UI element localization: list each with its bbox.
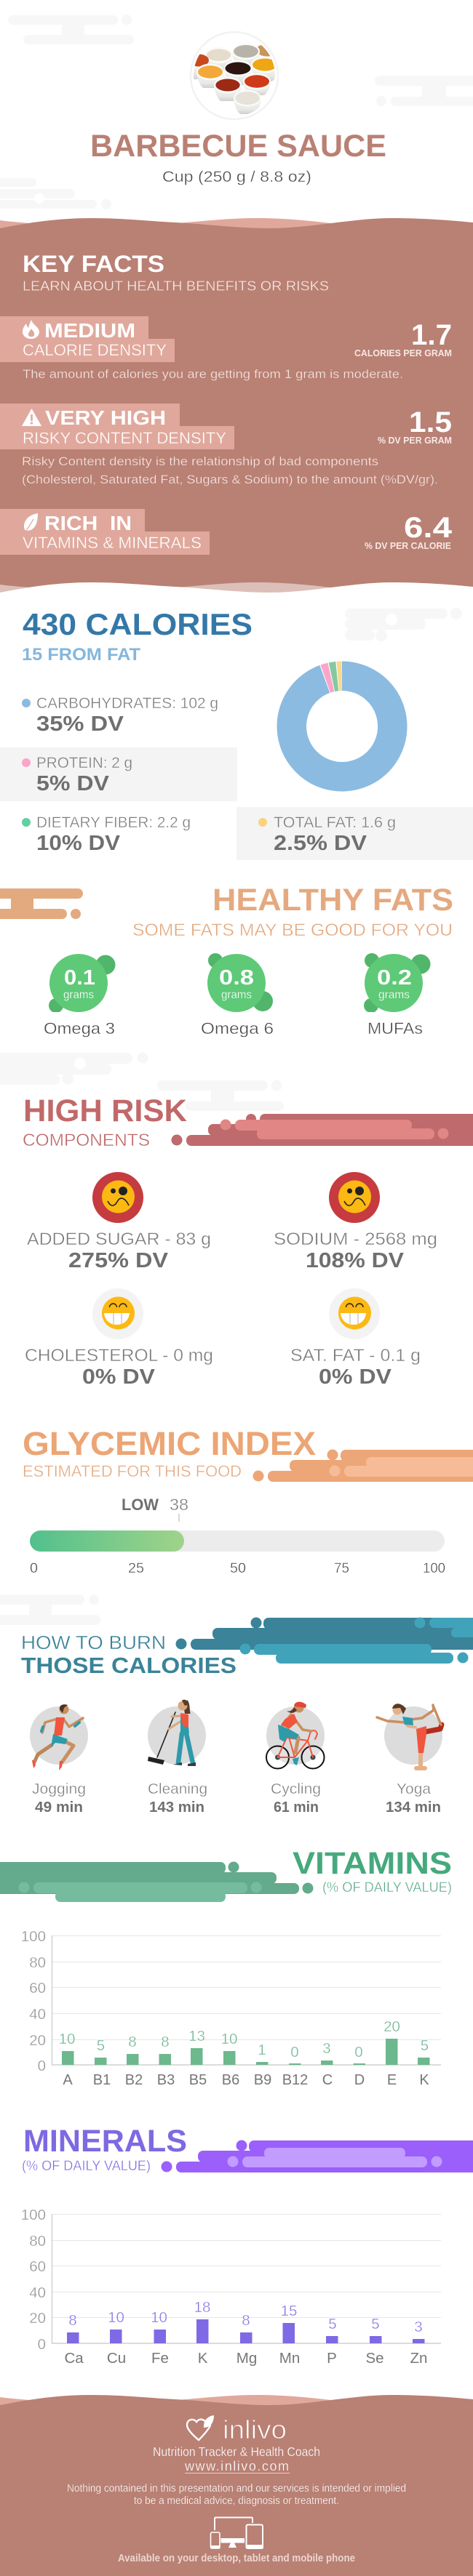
value: 1.7 — [411, 319, 452, 351]
icon: happy face — [329, 1288, 380, 1339]
component: added sugar — [27, 1172, 211, 1272]
bar chart: minerals: 20 — [29, 2310, 46, 2327]
unit: CALORIES PER GRAM — [354, 348, 452, 358]
component: cholesterol: 0% DV — [82, 1365, 156, 1389]
gauge scale: 0 — [30, 1561, 38, 1576]
gauge scale: 100 — [423, 1561, 445, 1576]
donut chart — [277, 662, 408, 791]
bar chart: minerals: 80 — [29, 2233, 46, 2250]
badge: mufas: 0.2 — [377, 966, 412, 990]
bar chart: vitamins: 10 — [59, 2031, 75, 2047]
icon: sad face — [329, 1172, 380, 1223]
fact: rich in vitamins and minerals — [0, 509, 453, 555]
bar chart: vitamins: B6 — [222, 2072, 239, 2088]
activity: jogging: 49 min — [35, 1799, 83, 1815]
panel: footer — [0, 2395, 473, 2576]
rating: VERY HIGH — [45, 406, 166, 429]
icon: devices — [210, 2517, 263, 2549]
bar chart: vitamins: C — [322, 2072, 333, 2088]
bar chart: minerals: P — [327, 2350, 337, 2367]
bar chart: vitamins: D — [354, 2072, 365, 2088]
badge: omega 6 — [201, 953, 274, 1038]
bar chart: minerals: 8 — [68, 2312, 77, 2329]
fact: risky content density — [0, 404, 452, 486]
bar chart: minerals: 40 — [29, 2284, 46, 2301]
badge: omega 6: Omega 6 — [201, 1019, 274, 1038]
subheading: ESTIMATED FOR THIS FOOD — [23, 1462, 242, 1480]
bar chart: vitamins: E — [387, 2072, 397, 2088]
bar chart: vitamins — [21, 1928, 441, 2088]
icon: leaf — [24, 513, 38, 531]
heading: GLYCEMIC INDEX — [23, 1425, 316, 1462]
bar chart: vitamins: B1 — [93, 2072, 111, 2088]
badge: omega 6: 0.8 — [219, 966, 254, 990]
label: RISKY CONTENT DENSITY — [23, 429, 226, 447]
bar chart: minerals: 18 — [194, 2299, 210, 2316]
badge: omega 3: Omega 3 — [44, 1019, 115, 1038]
gauge scale: 75 — [334, 1561, 349, 1576]
subheading: SOME FATS MAY BE GOOD FOR YOU — [132, 920, 453, 940]
badge: mufas: MUFAs — [367, 1019, 423, 1038]
fact: calorie density — [0, 316, 452, 381]
bar chart: vitamins: 5 — [421, 2037, 429, 2054]
food image: bowls of sauces — [190, 31, 279, 120]
icon: person sweeping — [148, 1700, 206, 1766]
bar chart: vitamins: 20 — [383, 2018, 400, 2035]
component: sodium — [274, 1172, 437, 1272]
legend: carbohydrates — [22, 695, 218, 736]
gauge scale — [30, 1561, 445, 1576]
activity: yoga: Yoga — [397, 1781, 432, 1797]
bar chart: vitamins: 0 — [38, 2058, 46, 2074]
heading: HEALTHY FATS — [212, 883, 453, 918]
component: added sugar: 275% DV — [68, 1249, 169, 1272]
description: The amount of calories you are getting from 1 gram is moderate. — [23, 368, 403, 381]
badge: omega 3 — [44, 954, 115, 1038]
bar chart: minerals: 10 — [151, 2309, 167, 2326]
unit: % DV PER CALORIE — [365, 541, 451, 551]
legend: total fat: TOTAL FAT: 1.6 g — [274, 814, 396, 831]
badge: mufas: grams — [378, 989, 410, 1001]
bar chart: minerals: Cu — [107, 2350, 126, 2367]
activity: jogging — [30, 1704, 88, 1815]
component: saturated fat — [290, 1288, 421, 1389]
icon: yoga pose — [377, 1704, 442, 1768]
icon: warning — [22, 409, 41, 426]
availability note: Available on your desktop, tablet and mobile phone — [118, 2552, 355, 2564]
component: sodium: 108% DV — [306, 1249, 405, 1272]
bar chart: vitamins: 8 — [128, 2034, 137, 2050]
panel: vitamins — [0, 1846, 452, 2088]
heading: key facts: KEY FACTS — [23, 251, 164, 277]
gauge scale: 50 — [230, 1561, 246, 1576]
activity: cleaning: Cleaning — [148, 1781, 207, 1797]
decorative banner — [0, 1861, 313, 1902]
subheading: (% OF DAILY VALUE) — [322, 1880, 452, 1895]
subheading: COMPONENTS — [23, 1131, 150, 1150]
bar chart: minerals: 60 — [29, 2258, 46, 2275]
bar chart: vitamins: B5 — [189, 2072, 207, 2088]
bar chart: vitamins: 0 — [354, 2044, 363, 2061]
bar chart: vitamins: 1 — [258, 2042, 266, 2058]
rating: RICH IN — [44, 512, 132, 534]
bar chart: vitamins: 60 — [29, 1980, 46, 1997]
label: CALORIE DENSITY — [23, 341, 167, 359]
decorative banner — [0, 888, 83, 919]
decorative banner — [253, 1450, 473, 1482]
legend: carbohydrates: 35% DV — [36, 713, 124, 736]
gauge value — [122, 1496, 188, 1522]
bar chart: minerals: Mn — [279, 2350, 300, 2367]
component: saturated fat: 0% DV — [319, 1365, 392, 1389]
panel: minerals — [21, 2124, 473, 2367]
component: saturated fat: SAT. FAT - 0.1 g — [290, 1346, 421, 1365]
description — [22, 455, 438, 486]
bar chart: minerals: 10 — [108, 2309, 124, 2326]
gauge value: LOW — [122, 1496, 159, 1514]
bar chart: minerals: Mg — [236, 2350, 257, 2367]
heading: MINERALS — [23, 2124, 187, 2159]
activity: cleaning — [148, 1700, 207, 1815]
bar chart: minerals: 8 — [242, 2312, 250, 2329]
panel: high risk components — [23, 1094, 473, 1389]
description: Risky Content density is the relationship of bad components — [22, 455, 378, 468]
activity: yoga: 134 min — [386, 1799, 441, 1815]
legend: dietary fiber — [22, 814, 191, 855]
bar chart: minerals: 3 — [414, 2319, 423, 2335]
bar chart: vitamins: B3 — [157, 2072, 175, 2088]
disclaimer: Nothing contained in this presentation and our services is intended or implied — [67, 2482, 406, 2495]
badge: mufas — [364, 953, 431, 1038]
bar chart: minerals: 0 — [38, 2336, 46, 2353]
bar chart: vitamins: B9 — [254, 2072, 271, 2088]
bar chart: vitamins: 20 — [29, 2032, 46, 2049]
rating: MEDIUM — [44, 319, 135, 342]
tagline: Nutrition Tracker & Health Coach — [153, 2444, 320, 2459]
legend: total fat — [236, 807, 473, 860]
bar chart: minerals: Ca — [64, 2350, 84, 2367]
bar chart: vitamins: B12 — [282, 2072, 308, 2088]
legend: protein: PROTEIN: 2 g — [36, 755, 132, 771]
value: 1.5 — [409, 406, 452, 438]
description: (Cholesterol, Saturated Fat, Sugars & Sodium) to the amount (%DV/gr). — [22, 473, 438, 486]
website link: www.inlivo.com — [184, 2459, 289, 2473]
panel: healthy fats — [0, 883, 453, 1038]
icon: flame — [23, 320, 39, 339]
heading line 2: THOSE CALORIES — [21, 1653, 236, 1678]
bar chart: minerals: K — [198, 2350, 208, 2367]
legend: protein — [0, 747, 237, 801]
subheading: LEARN ABOUT HEALTH BENEFITS OR RISKS — [23, 279, 329, 294]
icon: jogger — [30, 1704, 88, 1770]
bar chart: vitamins: 10 — [221, 2031, 237, 2047]
icon: sad face — [92, 1172, 143, 1223]
heading: calories: 430 CALORIES — [23, 607, 253, 641]
activity: cycling: Cycling — [271, 1781, 321, 1797]
value: 6.4 — [404, 512, 453, 544]
bar chart: minerals — [21, 2207, 441, 2367]
activity: cycling — [266, 1702, 325, 1815]
bar chart: minerals: Fe — [151, 2350, 169, 2367]
panel: glycemic index — [23, 1425, 473, 1576]
panel: calories — [0, 607, 473, 860]
bar chart: vitamins: K — [419, 2072, 429, 2088]
unit: % DV PER GRAM — [378, 436, 452, 446]
badge: omega 3: grams — [63, 989, 94, 1001]
gauge scale: 25 — [128, 1561, 144, 1576]
bar chart: vitamins: 3 — [322, 2040, 331, 2057]
subheading: from fat: 15 FROM FAT — [22, 645, 140, 665]
activity: cleaning: 143 min — [149, 1799, 204, 1815]
bar chart: minerals: Se — [365, 2350, 384, 2367]
bar chart: vitamins: 80 — [29, 1954, 46, 1971]
disclaimer — [67, 2482, 406, 2507]
disclaimer: to be a medical advice, diagnosis or treatment. — [134, 2495, 339, 2507]
icon: happy face — [92, 1288, 143, 1339]
bar chart: vitamins: 40 — [29, 2006, 46, 2023]
bar chart: minerals: 100 — [21, 2207, 46, 2223]
panel: key facts — [0, 218, 473, 604]
legend: protein: 5% DV — [36, 772, 110, 795]
badge: omega 6: grams — [221, 989, 252, 1001]
gauge value: 38 — [170, 1496, 188, 1514]
bar chart: vitamins: A — [63, 2072, 73, 2088]
legend: carbohydrates: CARBOHYDRATES: 102 g — [36, 695, 218, 712]
legend: dietary fiber: 10% DV — [36, 832, 121, 855]
bar chart: vitamins: 13 — [188, 2028, 205, 2045]
legend: dietary fiber: DIETARY FIBER: 2.2 g — [36, 814, 191, 831]
heading line 1: HOW TO BURN — [21, 1632, 166, 1653]
component: added sugar: ADDED SUGAR - 83 g — [27, 1229, 211, 1249]
logo: inlivo — [187, 2415, 287, 2444]
bar chart: vitamins: 0 — [290, 2044, 299, 2061]
bar chart: minerals: 5 — [328, 2316, 337, 2332]
decorative banner — [172, 1114, 473, 1146]
heading: VITAMINS — [293, 1846, 452, 1881]
bar chart: minerals: 5 — [371, 2316, 380, 2332]
decorative banner — [176, 1617, 473, 1664]
bar chart: minerals: 15 — [281, 2303, 297, 2319]
bar chart: vitamins: 100 — [21, 1928, 46, 1945]
decorative banner — [162, 2140, 473, 2172]
heading: HIGH RISK — [23, 1094, 187, 1128]
bar chart: minerals: Zn — [410, 2350, 427, 2367]
subheading: (% OF DAILY VALUE) — [22, 2159, 151, 2174]
activity: yoga — [377, 1704, 442, 1815]
logo: inlivo: inlivo — [223, 2415, 287, 2444]
bar chart: vitamins: 5 — [97, 2037, 105, 2054]
component: sodium: SODIUM - 2568 mg — [274, 1229, 437, 1249]
panel: how to burn those calories — [21, 1617, 473, 1815]
bar chart: vitamins: B2 — [125, 2072, 143, 2088]
serving size: Cup (250 g / 8.8 oz) — [162, 169, 311, 185]
icon: cyclist — [266, 1702, 325, 1768]
badge: omega 3: 0.1 — [64, 966, 95, 990]
activity: jogging: Jogging — [32, 1781, 86, 1797]
label: VITAMINS & MINERALS — [23, 534, 202, 552]
component: cholesterol: CHOLESTEROL - 0 mg — [25, 1346, 213, 1365]
component: cholesterol — [25, 1288, 213, 1389]
bar chart: vitamins: 8 — [161, 2034, 170, 2050]
title: BARBECUE SAUCE — [90, 129, 386, 164]
legend: total fat: 2.5% DV — [274, 832, 367, 855]
activity: cycling: 61 min — [274, 1799, 319, 1815]
gauge bar — [30, 1530, 445, 1552]
